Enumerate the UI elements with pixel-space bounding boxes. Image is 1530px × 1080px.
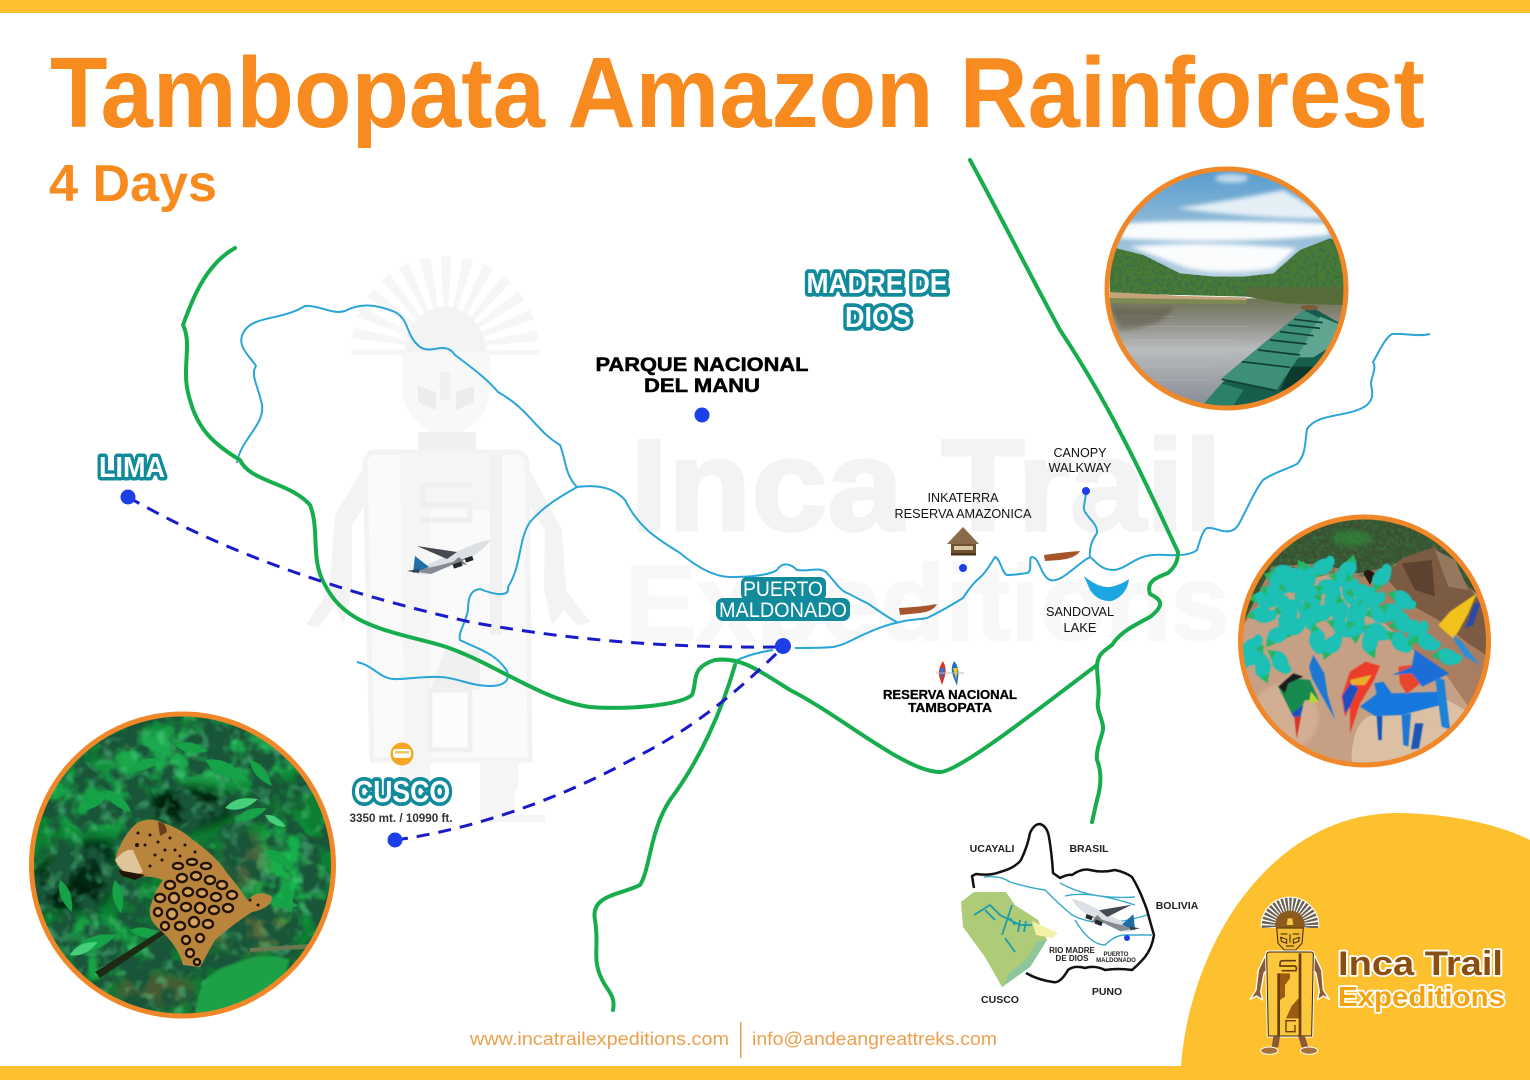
- label: Parque Nacional del Manu: PARQUE NACIONAL: [596, 355, 809, 376]
- watermark: brand text: [625, 412, 1230, 663]
- label: Sandoval Lake: [1046, 605, 1114, 635]
- inset marker: [1124, 935, 1130, 941]
- flight routes: [128, 497, 783, 840]
- logo wordmark: Inca Trail: [1338, 945, 1503, 983]
- icon: macaws: [936, 661, 964, 686]
- footer: email: info@andeangreattreks.com: [752, 1028, 997, 1049]
- inset map of Madre de Dios: [961, 824, 1199, 1006]
- icon: hut: [947, 527, 979, 556]
- bottom band: [0, 1066, 1530, 1080]
- inset labels: [970, 843, 1199, 1006]
- label: Sandoval Lake: SANDOVAL: [1046, 605, 1114, 619]
- boat: [1208, 310, 1338, 406]
- Manu reserve area: [961, 892, 1047, 987]
- inset labels: PUERTO: [1104, 952, 1129, 958]
- inset labels: BRASIL: [1069, 843, 1109, 855]
- location: Puerto Maldonado: PUERTO: [743, 578, 823, 601]
- location: Lima: [99, 452, 165, 504]
- logo: Inca Trail Expeditions: [1250, 905, 1505, 1054]
- location: Lima: LIMA: [99, 452, 165, 484]
- inset labels: CUSCO: [981, 994, 1019, 1006]
- inset plane: [1072, 899, 1140, 932]
- label: Inkaterra: [894, 491, 1032, 572]
- label: Reserva Nacional Tambopata: TAMBOPATA: [908, 700, 993, 715]
- footer: divider: [740, 1022, 742, 1058]
- buffer zones: [1002, 940, 1047, 987]
- rivers: [237, 305, 1430, 686]
- inset labels: MALDONADO: [1096, 958, 1136, 964]
- jaguar: [115, 820, 272, 967]
- label: Inkaterra: RESERVA AMAZONICA: [894, 507, 1032, 521]
- icon: plane: [407, 540, 490, 575]
- location: Puerto Maldonado: MALDONADO: [719, 599, 847, 622]
- region label: Madre de Dios: MADRE DE: [806, 268, 948, 300]
- region label: Madre de Dios: [806, 268, 948, 334]
- icon: bus: [390, 742, 414, 766]
- Manu tributaries: [974, 905, 1032, 952]
- label: Inkaterra: INKATERRA: [928, 491, 999, 505]
- logo figure: [1250, 905, 1329, 1054]
- location: Cusco: CUSCO: [354, 774, 450, 809]
- region label: Madre de Dios: DIOS: [845, 302, 911, 334]
- location: Cusco: 3350 mt. / 10990 ft.: [350, 813, 452, 825]
- label: Canopy Walkway: WALKWAY: [1048, 461, 1112, 475]
- outline: [972, 824, 1154, 982]
- top band: [0, 0, 1530, 13]
- macaws: [1278, 678, 1319, 713]
- title: Tambopata Amazon Rainforest: [50, 37, 1425, 149]
- label: Parque Nacional del Manu: DEL MANU: [644, 376, 760, 397]
- location: Cusco: [350, 774, 452, 848]
- marker: Manu: [694, 408, 710, 422]
- icon: boat west: [899, 604, 937, 615]
- label: Canopy Walkway: [1048, 446, 1112, 495]
- label: Parque Nacional del Manu: [596, 355, 809, 397]
- photo: jaguar in jungle: [28, 710, 338, 1020]
- icon: boat east: [1044, 551, 1080, 561]
- inset labels: PUNO: [1092, 986, 1122, 998]
- inset labels: DE DIOS: [1056, 954, 1089, 963]
- photo: macaws on clay lick: [1235, 510, 1495, 770]
- label: Reserva Nacional Tambopata: [883, 687, 1017, 715]
- subtitle: 4 Days: [49, 155, 217, 213]
- photo: river and boat: [1100, 160, 1357, 412]
- icon: Sandoval Lake: [1084, 576, 1129, 601]
- watermark: brand text: Inca Trail: [630, 412, 1222, 558]
- inset labels: BOLIVIA: [1156, 900, 1199, 912]
- label: Sandoval Lake: LAKE: [1064, 621, 1096, 635]
- watermark: brand text: Expeditions: [625, 542, 1230, 663]
- footer: website: www.incatrailexpeditions.com: [469, 1028, 729, 1049]
- yellow corner panel: [1181, 813, 1530, 1066]
- border lines: [183, 160, 1178, 1010]
- watermark: figure: [306, 290, 590, 822]
- inset labels: RIO MADRE: [1049, 946, 1096, 955]
- logo wordmark: [1338, 945, 1505, 1012]
- label: Canopy Walkway: CANOPY: [1054, 446, 1107, 460]
- inset rivers: [984, 877, 1152, 945]
- label: Reserva Nacional Tambopata: RESERVA NACIONAL: [883, 687, 1017, 702]
- logo wordmark: Expeditions: [1338, 981, 1505, 1012]
- inset labels: UCAYALI: [970, 843, 1014, 855]
- location: Puerto Maldonado: [716, 577, 850, 654]
